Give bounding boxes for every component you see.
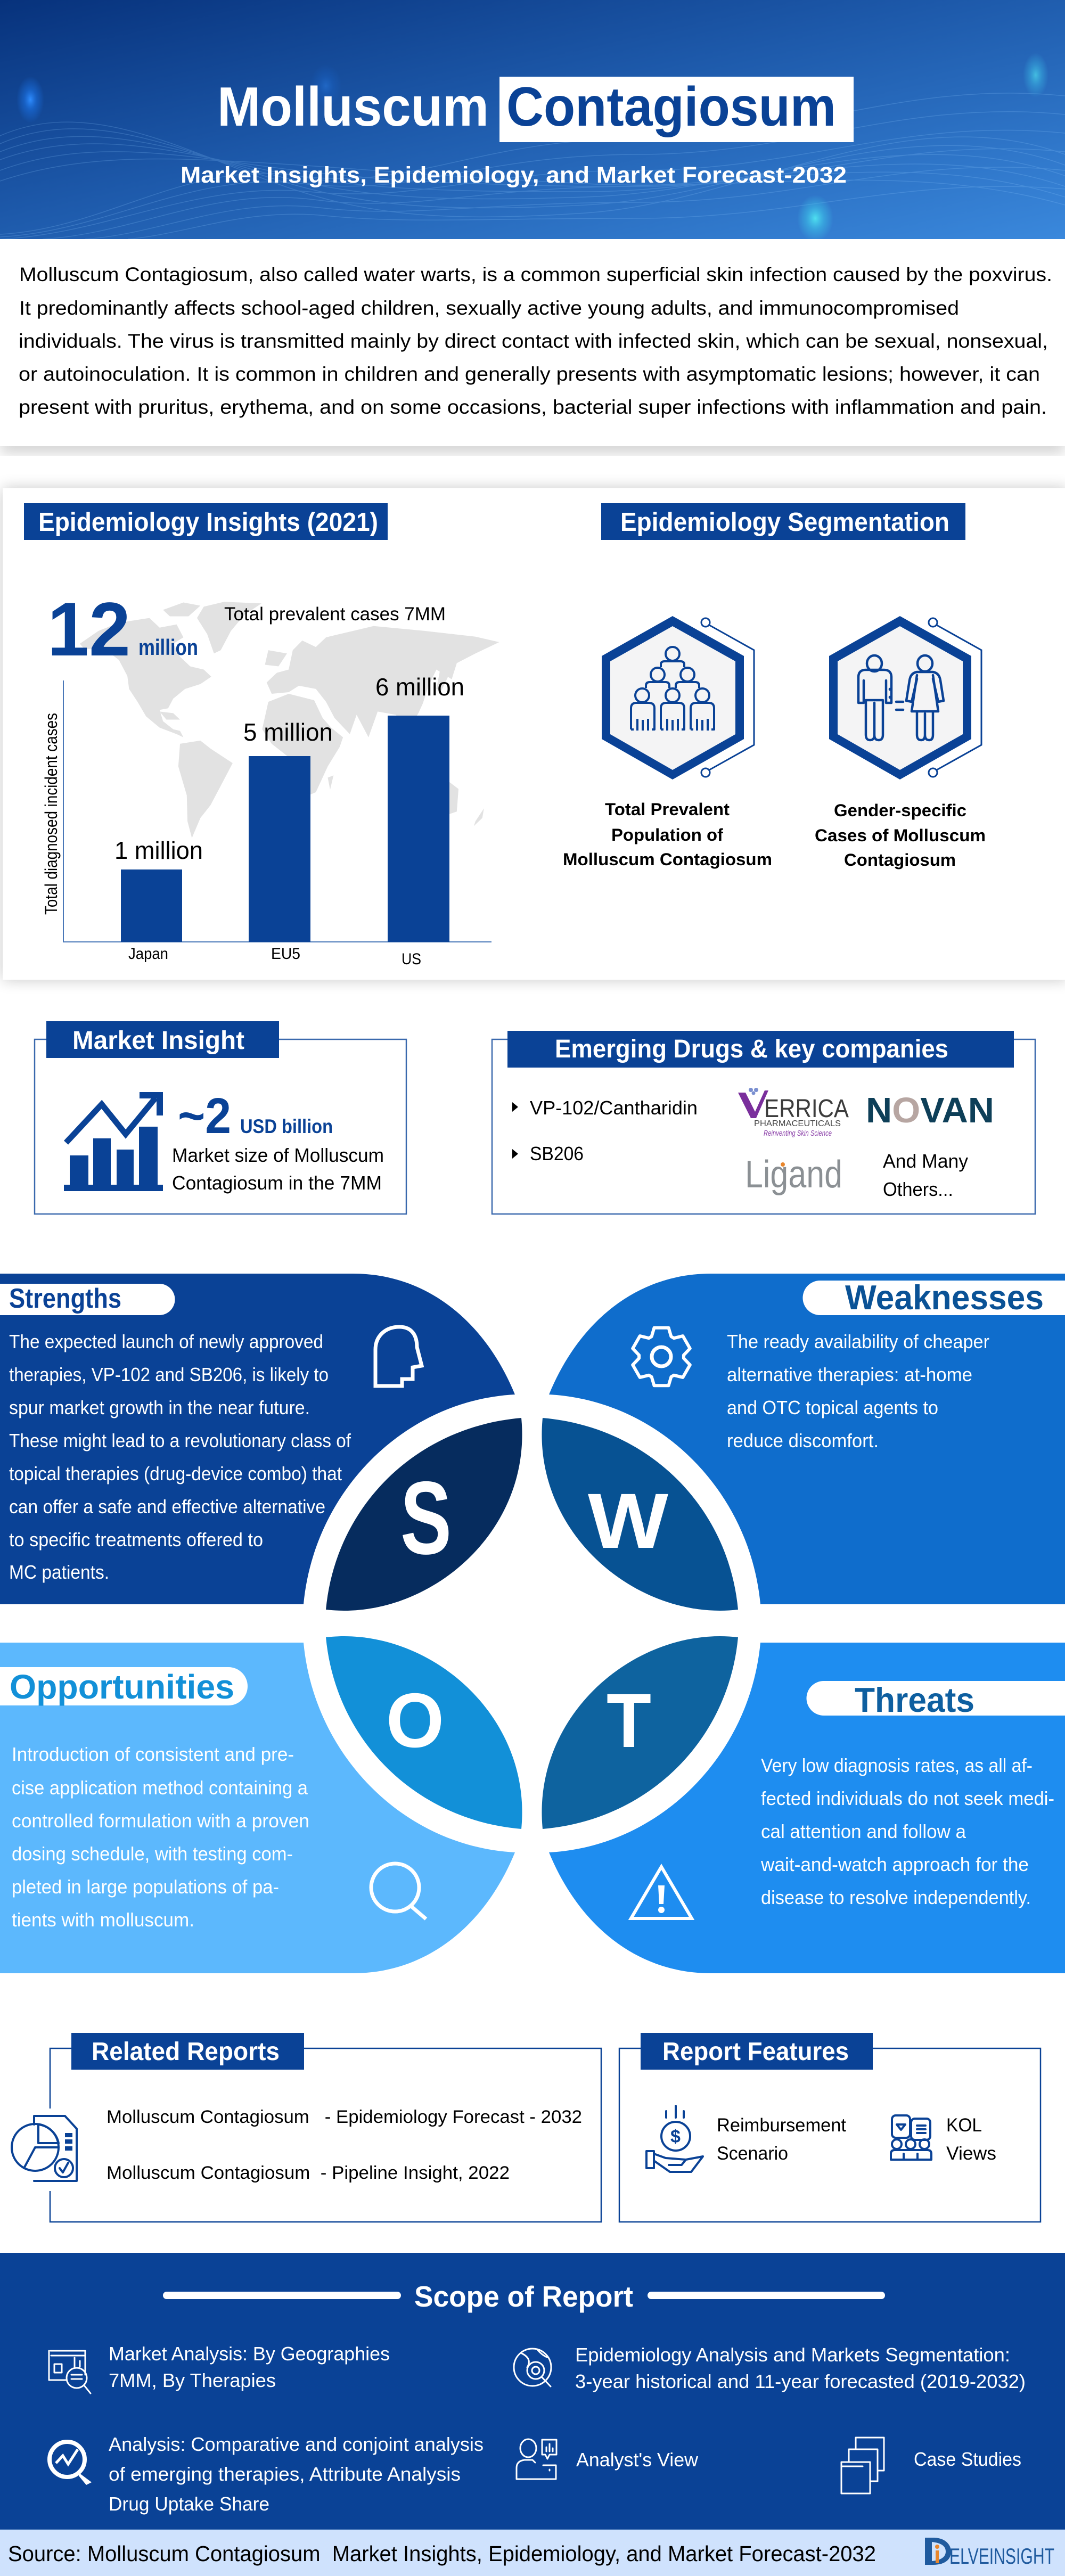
text: comparative analysis: of emerging therapies, Attribute Analysis <box>109 2463 461 2485</box>
text: strengths: topical therapies (drug-device combo) that <box>9 1463 342 1484</box>
drug list: VP-102/Cantharidin <box>530 1097 698 1119</box>
panel: emerging drugs <box>492 1031 1035 1214</box>
panel: weaknesses <box>542 1274 1065 1611</box>
heading: emerging drugs <box>507 1031 1014 1068</box>
heading: threats: Threats <box>855 1680 974 1719</box>
logo: ligand: Ligand <box>745 1153 842 1196</box>
text: epidemiology analysis: 3-year historical and 11-year forecasted (2019-2032) <box>575 2370 1026 2392</box>
text: weaknesses: The ready availability of cheaper <box>727 1331 989 1352</box>
panel: threats <box>542 1636 1065 1973</box>
text: analyst's view: Analyst's View <box>576 2449 699 2471</box>
icon: gear <box>633 1328 690 1385</box>
panel: epidemiology <box>3 488 1065 980</box>
panel: introduction: or autoinoculation. It is common in children and generally presents with asymptomatic lesions; however, it can <box>19 363 1040 385</box>
panel: introduction <box>0 239 1065 452</box>
text: comparative analysis: Analysis: Comparative and conjoint analysis <box>109 2433 484 2455</box>
text: strengths: MC patients. <box>9 1561 109 1583</box>
panel: opportunities <box>0 1636 522 1973</box>
bar chart: US <box>402 950 421 968</box>
label: gender-specific cases: Cases of Molluscum <box>815 826 986 845</box>
text: weaknesses: and OTC topical agents to <box>727 1397 938 1418</box>
text: KOL views: Views <box>946 2143 996 2164</box>
text: epidemiology analysis: Epidemiology Analysis and Markets Segmentation: <box>575 2344 1010 2366</box>
leaf: S <box>326 1418 522 1611</box>
text: weaknesses <box>727 1331 989 1451</box>
logo: novan: NOVAN <box>866 1090 994 1130</box>
heading: scope of report: Scope of Report <box>414 2280 633 2313</box>
text: opportunities: controlled formulation with a proven <box>12 1810 309 1832</box>
panel: related reports <box>12 2033 601 2222</box>
icon: reimbursement <box>646 2106 703 2172</box>
text: market analysis: 7MM, By Therapies <box>109 2369 276 2391</box>
logo: verrica: Reinventing Skin Science <box>764 1129 832 1138</box>
icon: warning <box>631 1867 692 1918</box>
icon: magnifier <box>371 1864 426 1919</box>
text: epidemiology analysis <box>575 2344 1026 2392</box>
heading: epidemiology segmentation: Epidemiology Segmentation <box>620 508 949 537</box>
leaf: T: T <box>607 1678 651 1763</box>
text: threats: cal attention and follow a <box>761 1820 966 1842</box>
text: strengths: therapies, VP-102 and SB206, is likely to <box>9 1364 329 1385</box>
bar chart: Japan <box>128 945 168 963</box>
text: strengths: These might lead to a revolutionary class of <box>9 1430 351 1451</box>
bar chart: 1 million <box>114 836 203 864</box>
heading: threats <box>806 1680 1065 1719</box>
text: strengths: can offer a safe and effective alternative <box>9 1496 325 1517</box>
big number <box>47 587 198 672</box>
text: opportunities: Introduction of consistent and pre- <box>12 1743 294 1765</box>
value: USD billion <box>240 1115 333 1137</box>
text: comparative analysis <box>109 2433 484 2515</box>
bar chart: Total diagnosed incident cases <box>42 713 61 915</box>
drug list: SB206 <box>530 1143 584 1164</box>
label: total prevalent population: Population of <box>611 825 723 844</box>
bar chart: 5 million <box>243 718 333 746</box>
text: KOL views: KOL <box>946 2115 982 2136</box>
heading: scope of report <box>163 2280 885 2313</box>
label: gender-specific cases <box>815 801 986 869</box>
text: reimbursement scenario <box>717 2115 846 2164</box>
label: gender-specific cases: Contagiosum <box>844 850 956 869</box>
title: Molluscum <box>217 76 489 138</box>
text: weaknesses: reduce discomfort. <box>727 1430 879 1451</box>
icon: case studies <box>841 2438 884 2493</box>
text: weaknesses: alternative therapies: at-home <box>727 1364 972 1385</box>
world map <box>80 602 499 838</box>
heading: emerging drugs: Emerging Drugs & key companies <box>555 1035 948 1063</box>
text: opportunities: tients with molluscum. <box>12 1909 194 1931</box>
big number: 12 <box>47 587 130 672</box>
panel: strengths <box>0 1274 522 1611</box>
text: market size: Contagiosum in the 7MM <box>172 1172 382 1194</box>
bar chart <box>42 673 491 968</box>
text: reimbursement scenario: Scenario <box>717 2143 788 2164</box>
leaf: O <box>326 1636 522 1829</box>
title <box>217 76 854 142</box>
heading: report features <box>641 2033 873 2070</box>
label: total prevalent population <box>563 800 772 869</box>
title: Contagiosum <box>506 76 836 138</box>
text: strengths: The expected launch of newly approved <box>9 1331 323 1352</box>
text: market analysis <box>109 2343 390 2391</box>
subtitle: Market Insights, Epidemiology, and Market Forecast-2032 <box>181 162 847 188</box>
panel: scope of report <box>0 2253 1065 2530</box>
heading: epidemiology insights: Epidemiology Insights (2021) <box>38 508 378 537</box>
logo: delveinsight <box>925 2538 1054 2569</box>
icon: comparative analysis <box>50 2442 92 2485</box>
heading: market insight: Market Insight <box>72 1027 244 1055</box>
text: opportunities <box>12 1743 309 1931</box>
heading: strengths: Strengths <box>9 1283 121 1314</box>
icon: reimbursement: $ <box>670 2127 681 2147</box>
icon: population hexagon <box>602 616 754 780</box>
text: market size: Market size of Molluscum <box>172 1144 384 1166</box>
label: gender-specific cases: Gender-specific <box>834 801 966 820</box>
text: report titles: Molluscum Contagiosum - Epidemiology Forecast - 2032 <box>106 2107 582 2127</box>
logo: verrica: PHARMACEUTICALS <box>754 1119 841 1128</box>
drug list <box>512 1097 698 1164</box>
panel: introduction: individuals. The virus is transmitted mainly by direct contact with infected skin, which can be sexual, nonsexual, <box>19 330 1048 352</box>
heading: market insight <box>46 1021 279 1058</box>
text: report titles: Molluscum Contagiosum - Pipeline Insight, 2022 <box>106 2163 510 2183</box>
icon: report <box>12 2109 80 2188</box>
heading: related reports: Related Reports <box>92 2038 280 2066</box>
value: ~2 <box>178 1088 231 1144</box>
panel: introduction: It predominantly affects school-aged children, sexually active young adults, and immunocompromised <box>19 297 959 319</box>
panel: market insight <box>35 1021 406 1214</box>
logo: verrica: ERRICA <box>764 1095 849 1123</box>
text: report titles <box>106 2107 582 2183</box>
text: opportunities: pleted in large populations of pa- <box>12 1876 279 1898</box>
leaf: T <box>542 1636 738 1829</box>
text: KOL views <box>946 2115 996 2164</box>
text: threats <box>760 1754 1054 1908</box>
heading: opportunities: Opportunities <box>10 1668 234 1706</box>
icon: gender hexagon <box>829 616 981 780</box>
text: case studies: Case Studies <box>914 2448 1021 2470</box>
text: market analysis: Market Analysis: By Geographies <box>109 2343 390 2365</box>
text: opportunities: cise application method containing a <box>12 1777 308 1799</box>
big number: million <box>138 635 198 660</box>
icon: analyst <box>517 2439 556 2479</box>
logo: verrica <box>738 1088 849 1138</box>
icon: head <box>375 1327 422 1386</box>
heading: weaknesses: Weaknesses <box>845 1278 1044 1317</box>
leaf: S: S <box>400 1460 452 1576</box>
panel: introduction: Molluscum Contagiosum, also called water warts, is a common superficial skin infection caused by the poxvirus. <box>19 264 1052 285</box>
text: strengths: spur market growth in the near future. <box>9 1397 310 1418</box>
text: threats: fected individuals do not seek medi- <box>761 1787 1054 1809</box>
leaf: W: W <box>588 1478 668 1565</box>
leaf: O: O <box>386 1677 444 1763</box>
total prevalent cases label: Total prevalent cases 7MM <box>224 604 446 625</box>
label: total prevalent population: Molluscum Contagiosum <box>563 850 772 869</box>
text: and many others <box>883 1150 968 1200</box>
panel: introduction: present with pruritus, erythema, and on some occasions, bacterial super infections with inflammation and pain. <box>19 396 1047 418</box>
icon: growth chart <box>64 1092 163 1191</box>
heading: report features: Report Features <box>662 2038 849 2066</box>
heading: related reports <box>71 2033 304 2070</box>
text: threats: disease to resolve independently. <box>761 1886 1031 1908</box>
label: total prevalent population: Total Prevalent <box>605 800 730 819</box>
footer <box>0 2529 1065 2576</box>
text: and many others: And Many <box>883 1150 968 1172</box>
source line: Source: Molluscum Contagiosum Market Insights, Epidemiology, and Market Forecast-2032 <box>8 2541 876 2566</box>
bar chart: EU5 <box>271 945 300 963</box>
text: strengths <box>9 1331 351 1583</box>
text: opportunities: dosing schedule, with testing com- <box>12 1843 293 1865</box>
icon: market analysis <box>49 2351 91 2393</box>
text: and many others: Others... <box>883 1178 953 1200</box>
text: market size <box>172 1144 384 1194</box>
text: threats: wait-and-watch approach for the <box>760 1853 1029 1875</box>
panel: report features <box>619 2033 1041 2222</box>
icon: epidemiology analysis <box>514 2349 551 2386</box>
header banner <box>0 0 1065 242</box>
leaf: W <box>542 1418 738 1611</box>
icon: KOL <box>891 2115 931 2160</box>
value <box>178 1088 333 1144</box>
text: comparative analysis: Drug Uptake Share <box>109 2493 269 2515</box>
text: reimbursement scenario: Reimbursement <box>717 2115 846 2136</box>
text: threats: Very low diagnosis rates, as all af- <box>761 1754 1033 1776</box>
bar chart: 6 million <box>375 673 464 701</box>
text: strengths: to specific treatments offered to <box>9 1529 263 1550</box>
